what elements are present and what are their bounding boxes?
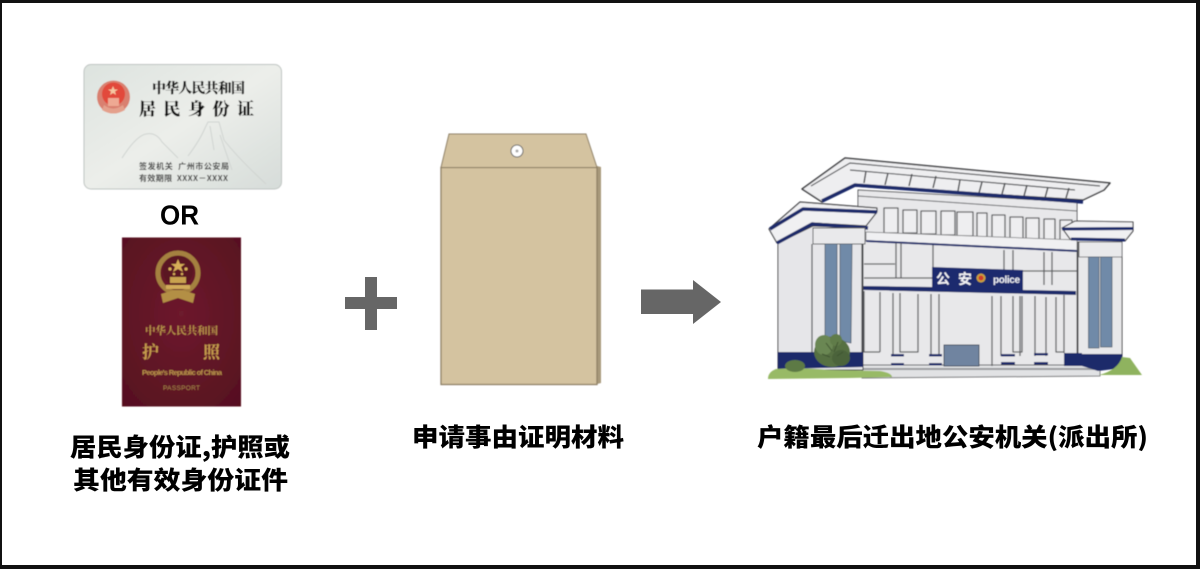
middle band xyxy=(866,232,1077,251)
navy beam xyxy=(863,286,1076,295)
passport word: PASSPORT xyxy=(163,385,200,392)
ground and steps xyxy=(862,365,1102,378)
left tower windows xyxy=(825,244,837,337)
column bases xyxy=(891,353,1048,366)
caption: supporting materials: 申请事由证明材料 xyxy=(412,418,624,454)
sign board: 公安 xyxy=(936,269,972,289)
lower columns xyxy=(864,291,1064,366)
passport title: 护 xyxy=(142,338,159,363)
sign board xyxy=(932,267,1023,292)
icon: passport xyxy=(122,238,241,406)
icon: resident ID card xyxy=(84,64,282,189)
upper roof xyxy=(802,158,1110,211)
passport title: 照 xyxy=(203,338,221,363)
right tower windows xyxy=(1088,257,1099,348)
icon: arrow xyxy=(641,280,721,324)
passport country name: 中华人民共和国 xyxy=(145,323,218,338)
door xyxy=(944,345,979,366)
main wall xyxy=(858,190,1077,365)
envelope grommet xyxy=(511,145,523,157)
right tower base xyxy=(1064,353,1122,371)
card national emblem xyxy=(97,80,130,114)
card details: 签发机关 广州市公安局 xyxy=(139,161,229,172)
card mountains xyxy=(122,122,266,184)
caption: identity documents: 居民身份证,护照或 xyxy=(70,428,290,464)
left tower base xyxy=(778,352,863,369)
left tower xyxy=(769,202,877,370)
passport english name: People's Republic of China xyxy=(142,368,223,377)
caption: identity documents xyxy=(70,428,290,497)
card name: 居民身份证 xyxy=(139,95,254,120)
right tower xyxy=(1062,221,1133,371)
icon: envelope xyxy=(441,134,601,384)
text: OR: OR xyxy=(160,200,199,230)
passport title xyxy=(142,338,221,363)
icon: police station building xyxy=(768,158,1142,379)
grass left xyxy=(768,368,892,379)
facade frames xyxy=(864,243,1077,288)
caption: identity documents: 其他有效身份证件 xyxy=(73,461,288,497)
icon: plus sign xyxy=(345,277,397,330)
upper windows xyxy=(884,208,1072,240)
caption: police office: 户籍最后迁出地公安机关(派出所) xyxy=(757,418,1148,454)
shrub xyxy=(814,334,850,367)
sign board: police xyxy=(993,275,1020,286)
grass right xyxy=(1099,357,1142,375)
icon: resident ID card: 有效期限 XXXX－XXXX xyxy=(139,173,228,184)
shrub small xyxy=(785,360,805,372)
passport emblem xyxy=(158,253,198,303)
card title: 中华人民共和国 xyxy=(152,78,245,98)
